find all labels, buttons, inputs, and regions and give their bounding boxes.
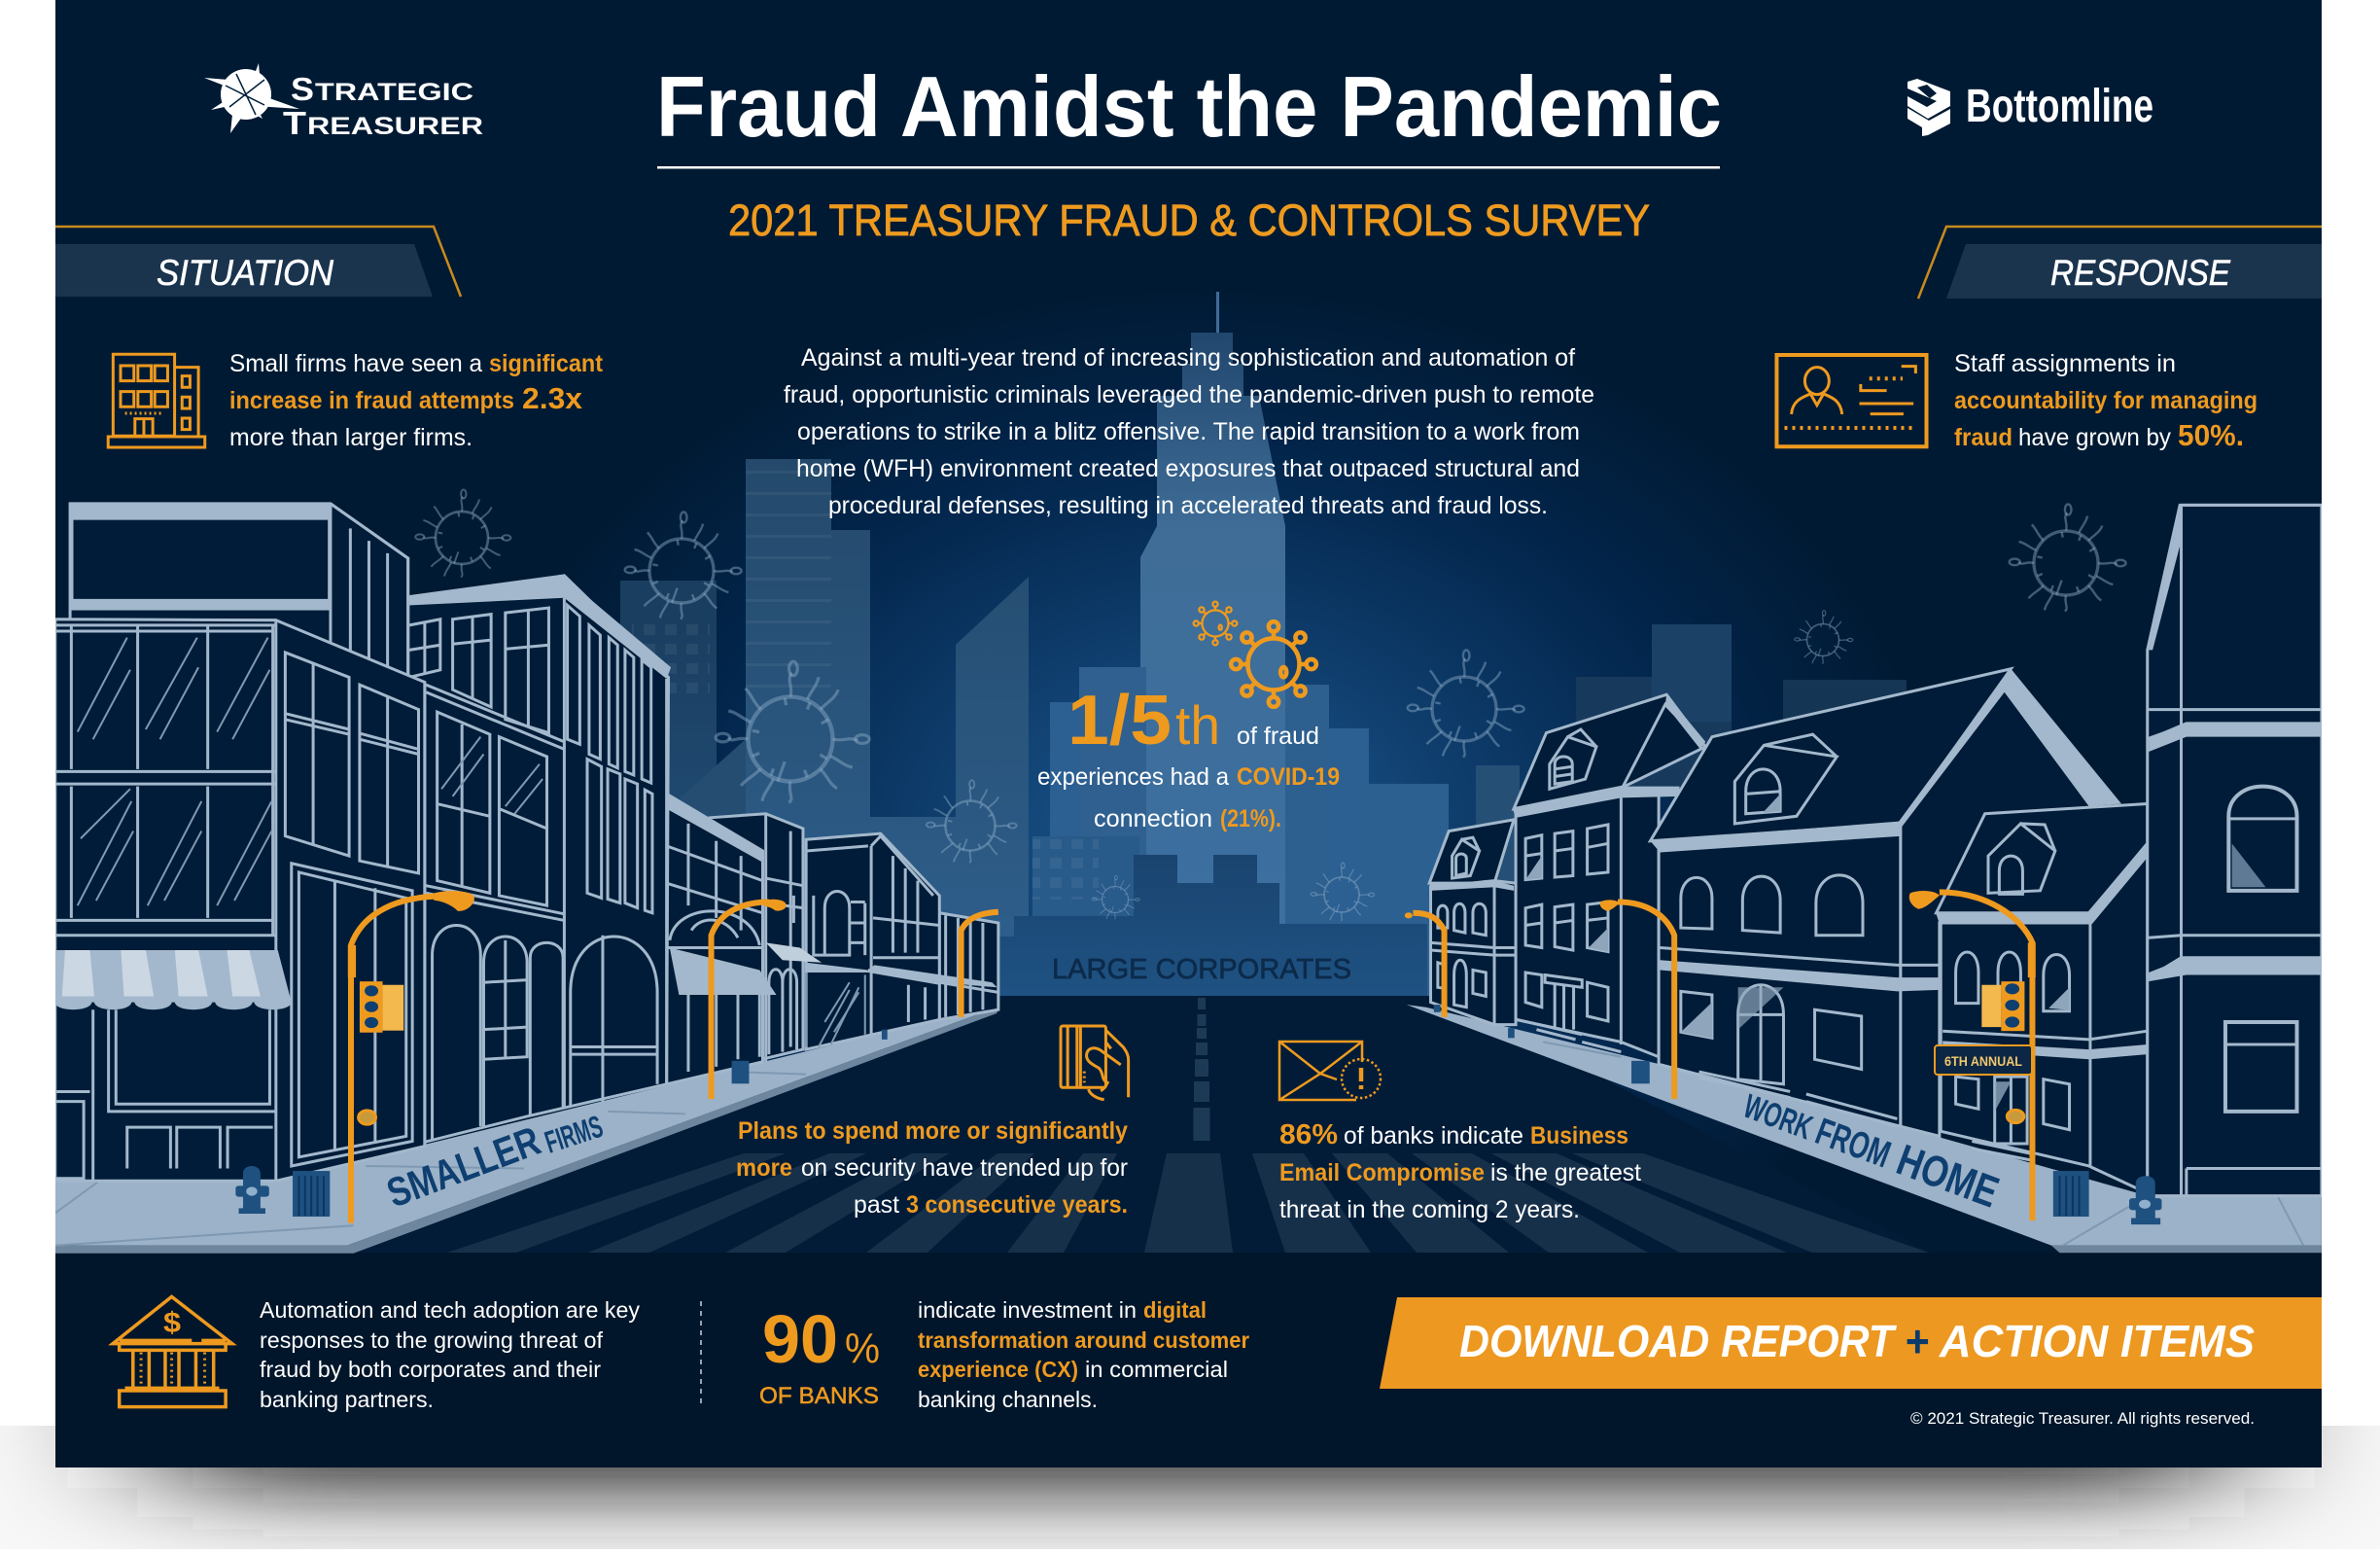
text: situation stat bbox=[229, 350, 604, 451]
intro paragraph: home (WFH) environment created exposures that outpaced structural and bbox=[796, 455, 1580, 482]
text: situation stat: increase in fraud attempts bbox=[229, 387, 514, 414]
text: response stat: fraud bbox=[1954, 424, 2012, 451]
stat: one fifth covid: experiences had a bbox=[1037, 763, 1229, 791]
text: digital transformation: transformation around customer bbox=[918, 1327, 1249, 1353]
stat: one fifth covid bbox=[1037, 682, 1340, 832]
building C bbox=[408, 575, 671, 1147]
text: digital transformation: in commercial bbox=[1085, 1357, 1228, 1382]
building A bbox=[70, 504, 408, 680]
text: digital transformation: banking channels. bbox=[918, 1387, 1098, 1412]
intro paragraph bbox=[784, 344, 1594, 519]
intro paragraph: Against a multi-year trend of increasing sophistication and automation of bbox=[801, 344, 1575, 371]
subtitle: 2021 TREASURY FRAUD & CONTROLS SURVEY bbox=[728, 195, 1650, 245]
title: Fraud Amidst the Pandemic bbox=[656, 58, 1722, 155]
skyline bbox=[620, 292, 1907, 1003]
sidewalk label: work from home: WORK bbox=[1738, 1087, 1817, 1147]
sidewalk label: smaller firms: SMALLER bbox=[381, 1117, 546, 1216]
text: security spend: more bbox=[736, 1154, 792, 1182]
text: automation: banking partners. bbox=[260, 1387, 434, 1412]
house far left bbox=[1429, 820, 1516, 1025]
icon: bank: $ bbox=[163, 1307, 181, 1339]
text: business email compromise: threat in the coming 2 years. bbox=[1279, 1196, 1580, 1223]
heading: large corporates: LARGE CORPORATES bbox=[1052, 954, 1351, 985]
street lights left bbox=[348, 891, 998, 1223]
text: security spend: on security have trended up for bbox=[801, 1154, 1128, 1182]
text: response stat: Staff assignments in bbox=[1954, 350, 2176, 377]
road center dashes bbox=[1194, 998, 1209, 1141]
sidewalk label: work from home: HOME bbox=[1891, 1135, 2006, 1218]
logo: strategic treasurer: REASURER bbox=[307, 113, 483, 140]
tab: situation: SITUATION bbox=[157, 253, 333, 293]
lower strip bbox=[714, 1253, 1687, 1391]
call to action banner: + bbox=[1905, 1316, 1929, 1366]
left street scene bbox=[54, 504, 998, 1254]
drop shadow under panel bbox=[0, 1426, 2380, 1549]
city scene bbox=[54, 292, 2322, 1468]
text: situation stat: 2.3x bbox=[522, 381, 583, 415]
small front house bbox=[1937, 804, 2149, 1193]
icon: envelope alert bbox=[1279, 1042, 1381, 1100]
stat: 90 percent of banks: % bbox=[845, 1325, 880, 1372]
text: response stat: 50%. bbox=[2178, 418, 2244, 452]
text: response stat: have grown by bbox=[2018, 424, 2171, 451]
stat: one fifth covid: of fraud bbox=[1237, 723, 1319, 750]
building B bbox=[55, 619, 564, 1181]
text: situation stat: significant bbox=[489, 350, 604, 377]
awning left bbox=[54, 950, 292, 1009]
intro paragraph: operations to strike in a blitz offensive. The rapid transition to a work from bbox=[797, 418, 1580, 445]
icon: office building bbox=[108, 354, 205, 447]
text: automation: fraud by both corporates and their bbox=[260, 1357, 601, 1382]
sidewalk label: work from home bbox=[1744, 1093, 2000, 1208]
text: automation bbox=[260, 1297, 640, 1412]
sidewalk right bbox=[1407, 1005, 2322, 1253]
text: automation: responses to the growing threat of bbox=[260, 1327, 604, 1353]
tab: situation bbox=[55, 227, 461, 297]
text: business email compromise: Email Compromise bbox=[1279, 1159, 1485, 1186]
text: business email compromise: 86% bbox=[1279, 1119, 1338, 1150]
call to action banner: DOWNLOAD REPORT bbox=[1459, 1316, 1898, 1366]
tab: response bbox=[1918, 227, 2322, 299]
text: business email compromise: Business bbox=[1530, 1122, 1628, 1149]
right street scene bbox=[1405, 505, 2322, 1253]
text: security spend: past bbox=[854, 1191, 899, 1219]
title rule bbox=[657, 166, 1720, 169]
stat: 90 percent of banks: 90 bbox=[762, 1301, 838, 1377]
text: situation stat: more than larger firms. bbox=[229, 424, 472, 451]
call to action banner: ACTION ITEMS bbox=[1939, 1316, 2255, 1366]
stat: one fifth covid: 1/5 bbox=[1068, 682, 1172, 760]
street lights right bbox=[1405, 891, 2036, 1220]
big house bbox=[1650, 669, 2121, 1136]
text: digital transformation: experience (CX) bbox=[918, 1357, 1078, 1382]
icon: staff id card bbox=[1776, 355, 1927, 446]
intro paragraph: procedural defenses, resulting in accelerated threats and fraud loss. bbox=[828, 492, 1548, 519]
icon: bank bbox=[113, 1296, 232, 1407]
text: business email compromise: is the greatest bbox=[1490, 1159, 1641, 1186]
sidewalk label: smaller firms: FIRMS bbox=[541, 1109, 607, 1160]
text: business email compromise bbox=[1279, 1119, 1641, 1223]
virus particles background bbox=[415, 490, 2126, 921]
logo: strategic treasurer: T bbox=[283, 105, 306, 141]
sidewalk left bbox=[55, 1005, 998, 1254]
stat: one fifth covid: (21%). bbox=[1220, 805, 1281, 832]
logo: bottomline: Bottomline bbox=[1966, 81, 2153, 132]
text: situation stat: Small firms have seen a bbox=[229, 350, 482, 377]
icon: payment card in hand bbox=[1061, 1026, 1129, 1100]
stat: one fifth covid: th bbox=[1175, 694, 1220, 756]
text: security spend: 3 consecutive years. bbox=[906, 1191, 1128, 1219]
tall tower right bbox=[2148, 505, 2322, 1196]
text: business email compromise: of banks indicate bbox=[1344, 1122, 1523, 1149]
crosswalk stripes bbox=[447, 1153, 1929, 1253]
stat: one fifth covid: connection bbox=[1094, 805, 1212, 832]
logo: strategic treasurer: TRATEGIC bbox=[315, 79, 473, 106]
text: digital transformation: indicate investment in bbox=[918, 1297, 1137, 1323]
copyright: © 2021 Strategic Treasurer. All rights reserved. bbox=[1910, 1410, 2255, 1428]
text: response stat bbox=[1954, 350, 2258, 452]
hydrant and trash can left bbox=[235, 1030, 888, 1217]
text: digital transformation: digital bbox=[1143, 1297, 1207, 1323]
text: security spend: Plans to spend more or significantly bbox=[738, 1117, 1128, 1145]
text: automation: Automation and tech adoption are key bbox=[260, 1297, 640, 1323]
sidewalk label: work from home: FROM bbox=[1810, 1111, 1896, 1177]
house second bbox=[1513, 694, 1705, 1057]
logo: bottomline bbox=[1908, 79, 2153, 136]
logo: strategic treasurer bbox=[204, 63, 483, 141]
far buildings left bbox=[667, 794, 998, 1084]
icon: covid particles bbox=[1194, 602, 1316, 707]
call to action banner bbox=[1380, 1297, 2322, 1389]
intro paragraph: fraud, opportunistic criminals leveraged the pandemic-driven push to remote bbox=[784, 381, 1594, 408]
logo: strategic treasurer: S bbox=[291, 71, 314, 107]
road bbox=[714, 996, 1690, 1253]
stat: 90 percent of banks: OF BANKS bbox=[759, 1383, 879, 1409]
text: security spend bbox=[736, 1117, 1128, 1219]
text: response stat: accountability for managing bbox=[1954, 387, 2258, 414]
hydrant and trash can right bbox=[1434, 1005, 2161, 1224]
text: digital transformation bbox=[918, 1297, 1249, 1412]
tab: response: RESPONSE bbox=[2050, 253, 2231, 293]
stat: one fifth covid: COVID-19 bbox=[1237, 763, 1340, 791]
sign: 6th annual: 6TH ANNUAL bbox=[1944, 1053, 2022, 1069]
sign: 6th annual bbox=[1935, 1045, 2032, 1075]
stat: 90 percent of banks bbox=[759, 1301, 880, 1409]
